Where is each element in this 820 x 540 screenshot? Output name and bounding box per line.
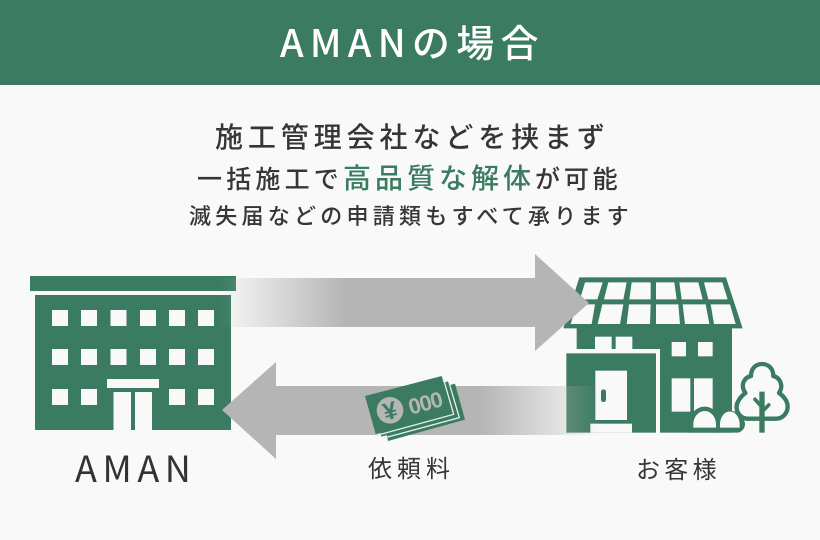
front note (365, 376, 452, 434)
arrow fade: customer to AMAN (480, 386, 600, 435)
label: fee: 依頼料 (368, 449, 455, 484)
house roof (563, 277, 743, 328)
title: AMANの場合 (280, 13, 545, 68)
upper and side windows (563, 337, 713, 434)
intro line 3: 滅失届などの申請類もすべて承ります (189, 199, 633, 231)
middle note (373, 381, 458, 437)
tree (737, 364, 788, 433)
door step (590, 424, 632, 433)
door handle (601, 389, 606, 402)
entrance block (566, 353, 656, 433)
intro line 1: 施工管理会社などを挟まず (215, 116, 610, 156)
icon: banknotes with yen (365, 376, 465, 441)
icon: AMAN office building (30, 276, 236, 430)
note amount: 000 (406, 387, 445, 420)
icon: customer house with solar panels and tree (563, 277, 788, 434)
house body (577, 327, 732, 433)
yen sign: ¥ (380, 397, 401, 427)
header band (0, 0, 820, 85)
middle note edge line (377, 377, 454, 435)
arrow: AMAN to customer (218, 278, 345, 327)
intro line 2 with highlight: 一括施工で高品質な解体が可能 (197, 157, 621, 197)
door (595, 371, 627, 420)
label: customer: お客様 (636, 450, 721, 485)
solar panels (571, 282, 736, 324)
yen coin (377, 397, 403, 424)
label: AMAN: AMAN (75, 441, 196, 493)
bushes (689, 407, 745, 433)
back note edge line (383, 383, 459, 438)
arrow head and shaft: AMAN to customer (345, 254, 589, 351)
back note (381, 384, 465, 441)
intro text block (189, 116, 633, 231)
arrow: customer to AMAN (222, 362, 480, 459)
